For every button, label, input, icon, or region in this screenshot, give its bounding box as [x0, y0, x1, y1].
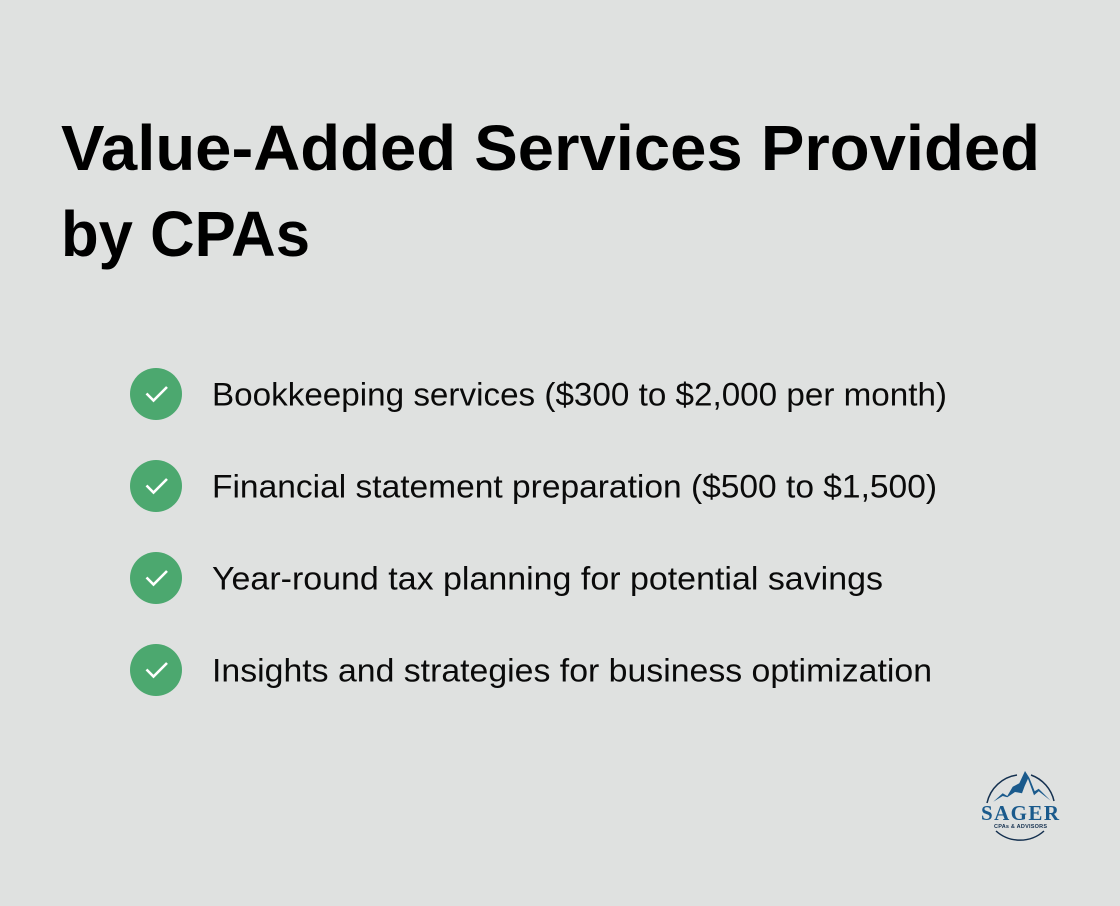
item: bookkeeping services — [130, 368, 947, 420]
item: financial statement preparation — [130, 460, 937, 512]
checklist — [130, 368, 947, 696]
item: insights and strategies — [130, 644, 932, 696]
logo wordmark: SAGER — [981, 801, 1060, 825]
title — [61, 112, 1040, 270]
item: financial statement preparation: Financial statement preparation ($500 to $1,500) — [212, 468, 937, 504]
title: by CPAs — [61, 198, 310, 270]
item: year-round tax planning — [130, 552, 883, 604]
item: year-round tax planning: Year-round tax planning for potential savings — [212, 560, 883, 596]
icon: circle arcs — [987, 775, 1054, 840]
item: insights and strategies: Insights and strategies for business optimization — [212, 652, 932, 688]
logo: Sager CPAs & Advisors — [981, 771, 1060, 840]
logo tagline: CPAs & ADVISORS — [994, 824, 1047, 830]
item: bookkeeping services: Bookkeeping services ($300 to $2,000 per month) — [212, 376, 947, 412]
title: Value-Added Services Provided — [61, 112, 1040, 184]
icon: mountain — [993, 771, 1051, 802]
